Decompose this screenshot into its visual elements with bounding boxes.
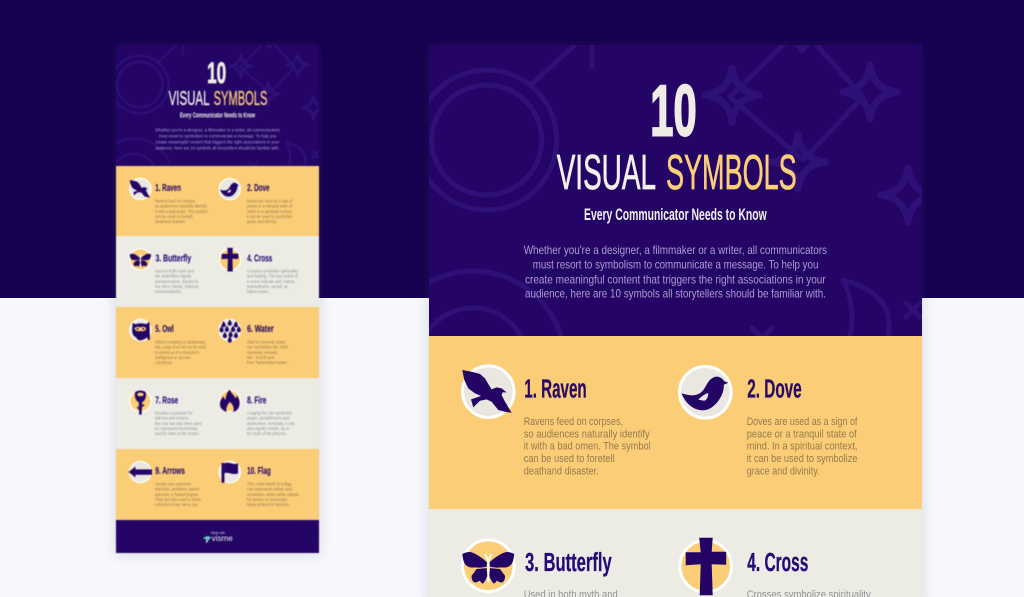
small item: 4 cross [219, 248, 299, 294]
small card: yellow band 1 [116, 166, 319, 236]
item: 2 dove [680, 366, 858, 477]
small item: 5 owl: intelligence or uncover [155, 355, 191, 360]
small card: grey band 4 [116, 378, 319, 449]
small item: 6 water: cleansing, renewal, [247, 350, 278, 355]
small item: 2 dove: 2. Dove [247, 182, 270, 194]
icon: dove [680, 366, 731, 418]
small item: 9 arrows: and action, or forward progress. [155, 492, 199, 497]
small item: 10 flag: 10. Flag [247, 465, 271, 477]
item: 1 raven [462, 366, 651, 477]
small item: 7 rose: to represent femininity [155, 426, 198, 431]
text: raven: deathand disaster. [524, 465, 599, 477]
small title: 10: 10 [207, 57, 226, 90]
small item: 10 flag: Many protest for freedom. [247, 502, 290, 507]
small item: 1 raven [130, 178, 208, 224]
small item: 7 rose: the rose has also been used [155, 421, 202, 426]
small item: 5 owl: to remind us of a character's [155, 350, 200, 355]
heading: cross: 4. Cross [747, 549, 808, 577]
small intro text: Whether you're a designer, a filmmaker or a writer, all communicators [155, 128, 280, 134]
icon: butterfly [462, 540, 514, 592]
small footer logo: visme [212, 534, 233, 543]
small card: yellow band 5 [116, 449, 319, 520]
small item: 3 butterfly: Used in both myth and [155, 269, 194, 274]
item: 3 butterfly [462, 540, 618, 597]
small item: 4 cross: and healing. The four points of [247, 274, 299, 279]
intro text: must resort to symbolism to communicate a message. To help you [533, 258, 818, 272]
title: 10: 10 [650, 72, 697, 152]
background: dark upper band [0, 0, 1024, 298]
small title: visual symbols: SYMBOLS [214, 88, 267, 110]
small item: 7 rose [130, 390, 202, 436]
small item: 5 owl: a sly laziness. [155, 360, 172, 365]
panel: grey band [429, 509, 922, 597]
title: visual symbols: VISUAL [557, 146, 656, 200]
intro text: audience, here are 10 symbols all storytellers should be familiar with. [525, 287, 826, 301]
small item: 1 raven: so audiences naturally identify [155, 204, 208, 209]
small item: 8 fire [219, 390, 295, 436]
small item: 8 fire: 8. Fire [247, 395, 267, 407]
small item: 2 dove: mind. In a spiritual context, [247, 209, 292, 214]
small item: 3 butterfly: the often chaotic, hideous [155, 284, 199, 289]
small title: visual symbols: VISUAL [169, 88, 209, 110]
text: dove [747, 416, 858, 477]
small item: 3 butterfly: transformation, thanks to [155, 279, 199, 284]
small item: 6 water: etc. You'll see [247, 355, 275, 360]
small item: 2 dove: it can be used to symbolize [247, 214, 293, 219]
small item: 2 dove: peace or a tranquil state of [247, 204, 293, 209]
small item: 9 arrows: a direction in love, mercy, ego. [155, 502, 198, 507]
intro text [524, 243, 827, 301]
title: visual symbols: SYMBOLS [666, 146, 797, 200]
small item: 2 dove: Doves are used as a sign of [247, 199, 293, 204]
small item: 10 flag: for peace or surrender. [247, 497, 288, 502]
icon: raven [462, 366, 514, 418]
small item: 9 arrows [128, 461, 201, 507]
small item: 3 butterfly: art, butterflies signify [155, 274, 192, 279]
small item: 2 dove: grace and divinity. [247, 219, 277, 224]
small item: 10 flag: can represent nation and [247, 487, 293, 492]
small item: 10 flag [219, 461, 299, 507]
small intro text: must resort to symbolism to communicate a message. To help you [159, 134, 277, 140]
small item: 10 flag: The color itself of a flag [247, 482, 292, 487]
small card: footer [116, 520, 319, 553]
text: raven: so audiences naturally identify [524, 428, 650, 440]
small item: 7 rose: 7. Rose [155, 395, 178, 407]
intro text: Whether you're a designer, a filmmaker or a writer, all communicators [524, 243, 827, 257]
small item: 6 water: Vital for survival, water [247, 340, 286, 345]
small intro text: create meaningful content that triggers the right associations in your [156, 140, 280, 146]
small item: 10 flag: revolution, while white stands [247, 492, 299, 497]
text: raven [524, 416, 651, 477]
small card: yellow band 3 [116, 307, 319, 378]
small item: 6 water [219, 319, 289, 365]
background: light lower band [0, 298, 1024, 597]
icon: cross [680, 538, 732, 595]
text: dove: Doves are used as a sign of [747, 416, 858, 428]
small item: 1 raven: 1. Raven [155, 182, 181, 194]
small item: 9 arrows: direction, ambition, speed [155, 487, 199, 492]
subtitle: Every Communicator Needs to Know [584, 205, 767, 224]
small card: grey band 2 [116, 236, 319, 307]
panel: header [429, 45, 922, 336]
small item: 2 dove [219, 179, 293, 224]
small item: 5 owl [130, 319, 206, 365]
decorative symbol outlines [429, 45, 922, 336]
small item: 6 water: 6. Water [247, 323, 274, 335]
small item: 9 arrows: 9. Arrows [155, 465, 185, 477]
small item: 9 arrows: Arrows can represent [155, 482, 191, 487]
text: dove: mind. In a spiritual context, [747, 441, 857, 453]
small item: 6 water: can symbolize life, birth, [247, 345, 289, 350]
heading: raven: 1. Raven [524, 375, 587, 403]
small item: 3 butterfly [130, 249, 199, 294]
panel: yellow band [429, 336, 922, 509]
small item: 1 raven: Ravens feed on corpses, [155, 199, 196, 204]
text: dove: grace and divinity. [747, 465, 820, 477]
small intro text [155, 128, 280, 152]
small item: 7 rose: Besides a passion for [155, 411, 193, 416]
small item: 4 cross: a cross indicate self, nature, [247, 279, 295, 284]
small item: 4 cross: Crosses symbolize spirituality [247, 269, 299, 274]
small item: 7 rose: and the Wars of the Roses. [155, 431, 199, 436]
small item: 3 butterfly: metamorphosis. [155, 289, 182, 294]
small item: 5 owl: When creating a cautionary [155, 340, 206, 345]
small footer logo [203, 531, 233, 543]
small item: 8 fire: A raging fire can symbolize [247, 411, 293, 416]
text: raven: can be used to foretell [524, 453, 615, 465]
text: raven: Ravens feed on corpses, [524, 416, 623, 428]
small item: 4 cross: higher power. [247, 289, 269, 294]
small full infographic preview card [96, 43, 324, 553]
text: raven: it with a bad omen. The symbol [524, 441, 651, 453]
small item: 8 fire: anger, punishment and [247, 416, 290, 421]
small item: 1 raven: it with a bad omen. The symbol [155, 209, 207, 214]
small item: 6 water: from "lamentation water." [247, 360, 289, 365]
small item: 4 cross: 4. Cross [247, 253, 272, 265]
small card: header panel [116, 44, 319, 166]
text: dove: peace or a tranquil state of [747, 428, 857, 440]
small subtitle: Every Communicator Needs to Know [180, 113, 255, 120]
heading: butterfly: 3. Butterfly [525, 549, 612, 577]
small item: 8 fire: the myth of the phoenix. [247, 431, 287, 436]
small intro text: audience, here are 10 symbols all storytellers should be familiar with. [156, 146, 279, 152]
small item: 5 owl: tale, a sign of an owl can be used [155, 345, 206, 350]
small item: 8 fire: destruction. Ironically, it can [247, 421, 295, 426]
heading: dove: 2. Dove [747, 375, 802, 403]
text: dove: it can be used to symbolize [747, 453, 857, 465]
small item: 1 raven: can be used to foretell [155, 214, 192, 219]
small item: 7 rose: wild love and romance, [155, 416, 189, 421]
small item: 3 butterfly: 3. Butterfly [156, 253, 191, 265]
small footer logo: Made with [211, 531, 225, 535]
large zoomed card [424, 45, 928, 597]
small item: 8 fire: also signify rebirth, as in [247, 426, 290, 431]
small item: 5 owl: 5. Owl [155, 323, 174, 335]
small item: 1 raven: deathand disaster. [155, 219, 186, 224]
small item: 4 cross: wisdom and a [247, 284, 288, 289]
intro text: create meaningful content that triggers the right associations in your [525, 272, 826, 286]
item: 4 cross [680, 538, 871, 597]
small item: 9 arrows: They are also used to show [155, 497, 201, 502]
